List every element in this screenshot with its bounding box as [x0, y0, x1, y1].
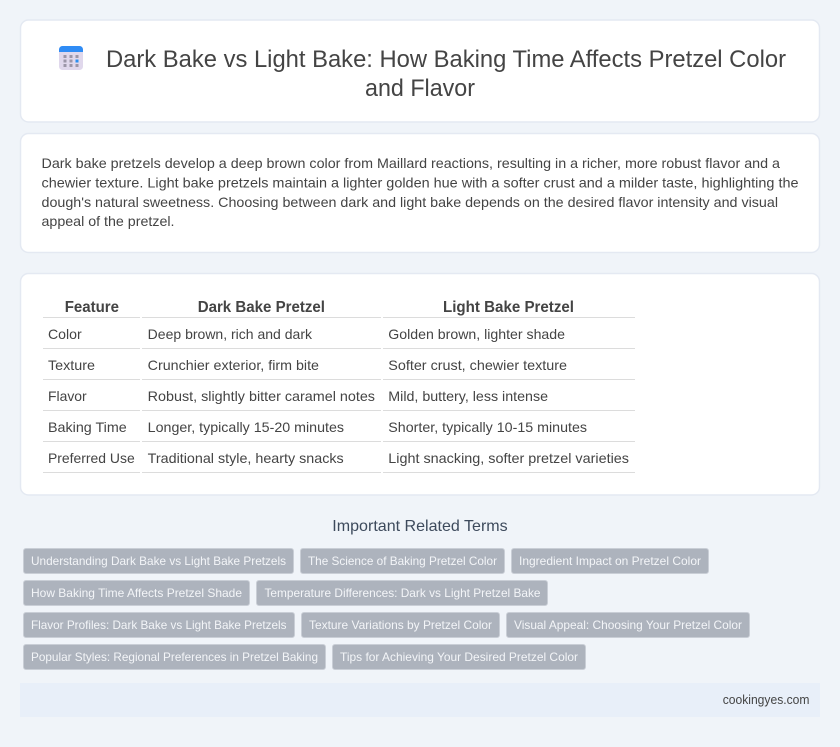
tag: Popular Styles: Regional Preferences in Pretzel Baking — [31, 650, 318, 664]
tag: Flavor Profiles: Dark Bake vs Light Bake Pretzels — [31, 618, 286, 632]
title: Dark Bake vs Light Bake: How Baking Time Affects Pretzel Color — [106, 46, 786, 73]
table row: baking time — [43, 419, 635, 442]
table row: preferred use — [43, 450, 635, 472]
table row: color — [43, 326, 635, 348]
tag — [302, 612, 500, 638]
table row: baking time: Shorter, typically 10-15 minutes — [388, 419, 587, 435]
table header row: Feature — [65, 299, 119, 316]
text block: summary paragraph — [42, 155, 799, 229]
tag — [506, 612, 750, 638]
panel: title header — [20, 20, 820, 122]
footer source text: cookingyes.com — [723, 692, 810, 707]
tag — [512, 548, 708, 574]
tag: How Baking Time Affects Pretzel Shade — [31, 586, 242, 600]
tag — [24, 580, 250, 606]
tag — [24, 612, 294, 638]
panel: introduction — [20, 134, 820, 252]
table row: texture: Texture — [48, 357, 95, 373]
table row: flavor: Mild, buttery, less intense — [388, 388, 548, 404]
table row: texture: Crunchier exterior, firm bite — [148, 357, 319, 373]
table row: color: Color — [48, 326, 82, 342]
table row: preferred use: Light snacking, softer pretzel varieties — [388, 450, 629, 466]
tag: Understanding Dark Bake vs Light Bake Pretzels — [31, 554, 286, 568]
table row: preferred use: Preferred Use — [48, 450, 135, 466]
tag: Texture Variations by Pretzel Color — [309, 618, 492, 632]
panel: comparison table — [20, 274, 820, 495]
table header row: Light Bake Pretzel — [443, 299, 574, 316]
table header row — [43, 299, 635, 318]
tag — [24, 644, 326, 670]
table row: color: Deep brown, rich and dark — [148, 326, 313, 342]
tag — [332, 644, 586, 670]
text block: summary paragraph: dough's natural sweetness. Choosing between dark and light bake depends on the desired flavor intensity and visual — [42, 194, 778, 210]
heading: important related terms: Important Related Terms — [332, 518, 508, 535]
panel: related term tags — [24, 548, 750, 670]
tag: Temperature Differences: Dark vs Light Pretzel Bake — [264, 586, 541, 600]
text block: summary paragraph: Dark bake pretzels develop a deep brown color from Maillard reactions, resulting in a richer, more robust flavor and a — [42, 155, 780, 171]
table header row: Dark Bake Pretzel — [198, 299, 325, 316]
title: and Flavor — [365, 75, 475, 102]
tag — [256, 580, 548, 606]
tag: Tips for Achieving Your Desired Pretzel Color — [340, 650, 578, 664]
table row: baking time: Longer, typically 15-20 minutes — [148, 419, 344, 435]
text block: summary paragraph: appeal of the pretzel. — [42, 213, 174, 229]
table row: flavor: Flavor — [48, 388, 87, 404]
text block: summary paragraph: chewier texture. Light bake pretzels maintain a lighter golden hue with a softer crust and a milder taste, highlighting the — [42, 174, 799, 190]
title — [106, 46, 786, 102]
table row: color: Golden brown, lighter shade — [388, 326, 565, 342]
tag — [300, 548, 504, 574]
table row: texture — [43, 357, 635, 380]
icon: calendar — [59, 46, 83, 70]
footer — [20, 683, 820, 717]
table row: preferred use: Traditional style, hearty snacks — [148, 450, 344, 466]
tag — [24, 548, 294, 574]
table row: texture: Softer crust, chewier texture — [388, 357, 567, 373]
table row: flavor: Robust, slightly bitter caramel notes — [148, 388, 375, 404]
table row: baking time: Baking Time — [48, 419, 127, 435]
tag: The Science of Baking Pretzel Color — [308, 554, 497, 568]
tag: Ingredient Impact on Pretzel Color — [519, 554, 701, 568]
tag: Visual Appeal: Choosing Your Pretzel Color — [514, 618, 742, 632]
table row: flavor — [43, 388, 635, 410]
